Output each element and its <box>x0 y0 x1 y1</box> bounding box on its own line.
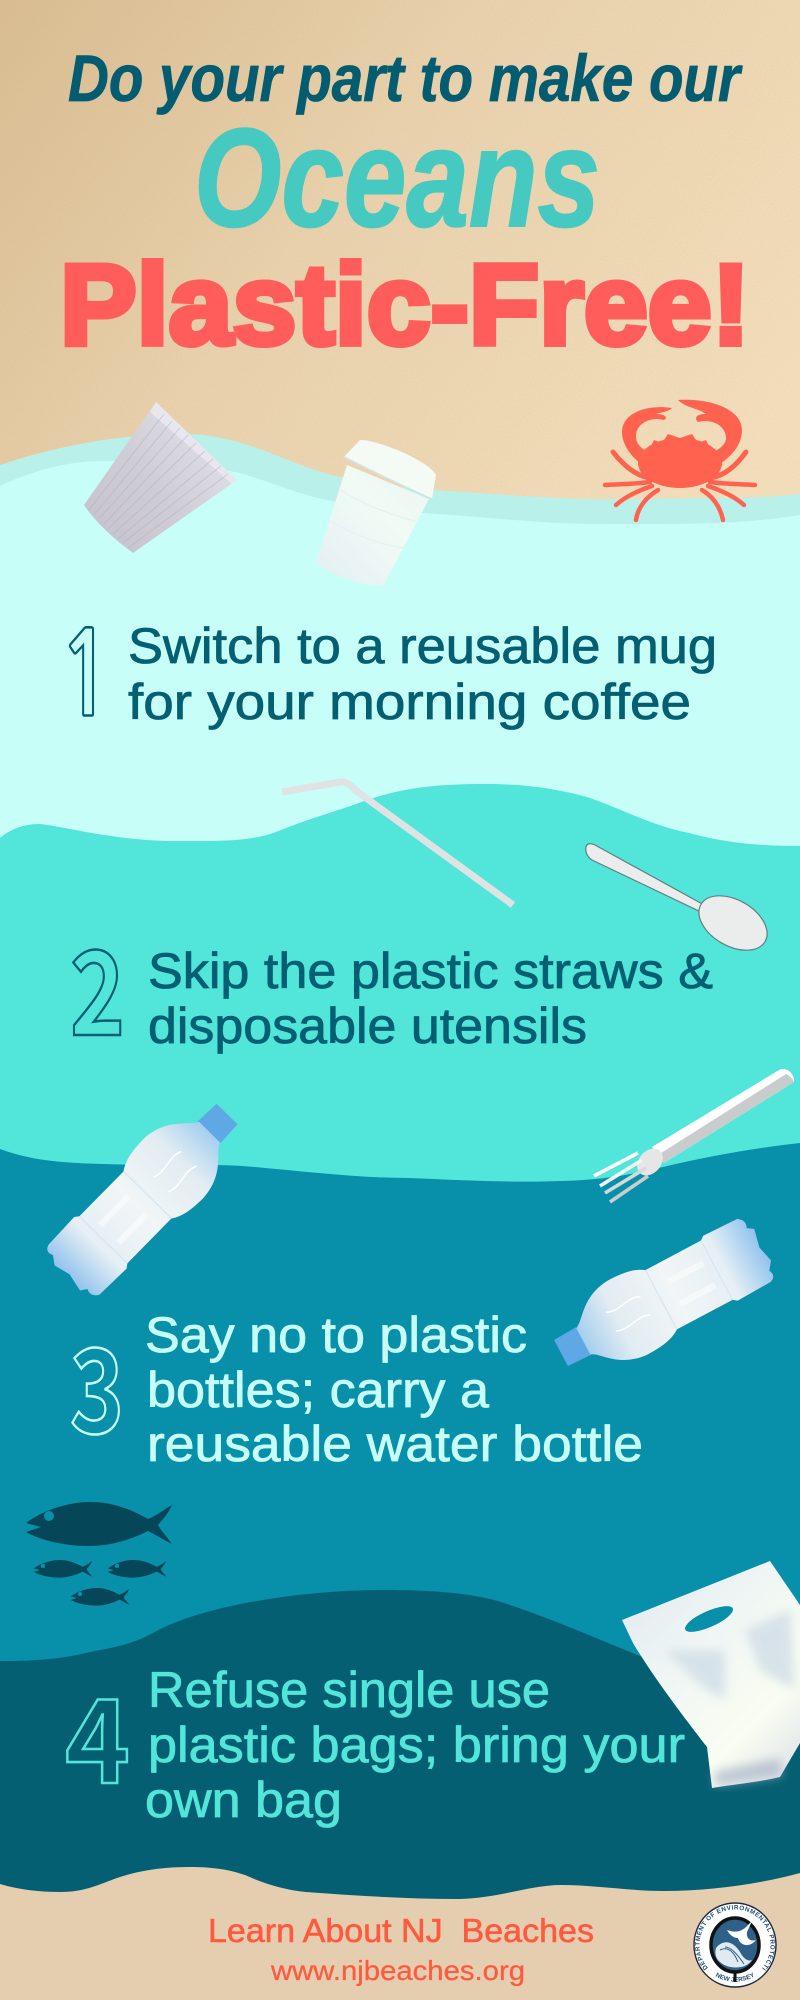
step 2 text: Skip the plastic straws & <box>148 943 713 999</box>
step 3 text: reusable water bottle <box>147 1416 643 1472</box>
panel: bottom beach <box>0 1867 800 2000</box>
footer: website: www.njbeaches.org <box>270 1955 525 1986</box>
icon: spoon <box>586 844 777 961</box>
step 2 text: disposable utensils <box>148 998 587 1054</box>
panel: step 2 water <box>0 784 800 1200</box>
logo: NJDEP seal: NEW JERSEY <box>716 1972 754 1982</box>
panel: step 4 water <box>0 1590 800 1910</box>
footer: learn about heading: Learn About NJ Beaches <box>208 1912 594 1949</box>
step 3 text: Say no to plastic <box>145 1307 527 1363</box>
title word: Oceans: Oceans <box>194 99 600 256</box>
panel: step 3 water <box>0 1143 800 1700</box>
icon: plastic fork <box>594 1069 794 1202</box>
step 1 text <box>128 618 717 730</box>
step 4 text <box>145 1662 685 1828</box>
icon: bendy straw <box>282 782 513 905</box>
background: sand texture <box>0 0 800 640</box>
title line: Plastic-Free: Plastic-Free! <box>60 242 750 369</box>
icon: school of fish <box>26 1502 172 1606</box>
wave: pale foam edge <box>0 434 800 560</box>
step 4 number: 4 <box>65 1649 130 1817</box>
step 1 number: 1 <box>58 618 114 733</box>
step 4 text: own bag <box>145 1772 342 1828</box>
step 1 text: for your morning coffee <box>128 674 691 730</box>
icon: crab <box>605 400 755 520</box>
icon: plastic bag <box>622 1561 800 1788</box>
icon: plastic cup <box>84 402 237 553</box>
step 2 text <box>148 943 713 1054</box>
panel: step 1 water <box>0 461 800 900</box>
icon: disposable coffee cup <box>316 440 436 586</box>
logo: NJDEP seal: DEPARTMENT OF ENVIRONMENTAL PROTECTION <box>695 1905 775 1971</box>
icon: water bottle right <box>541 1208 783 1390</box>
step 4 text: Refuse single use <box>148 1662 550 1718</box>
icon: water bottle left <box>37 1085 257 1307</box>
step 4 text: plastic bags; bring your <box>148 1717 685 1773</box>
step 1 text: Switch to a reusable mug <box>128 618 717 674</box>
step 3 text <box>145 1307 643 1472</box>
step 3 text: bottles; carry a <box>147 1362 489 1418</box>
step 2 number: 2 <box>70 901 125 1069</box>
step 3 number: 3 <box>70 1299 124 1467</box>
